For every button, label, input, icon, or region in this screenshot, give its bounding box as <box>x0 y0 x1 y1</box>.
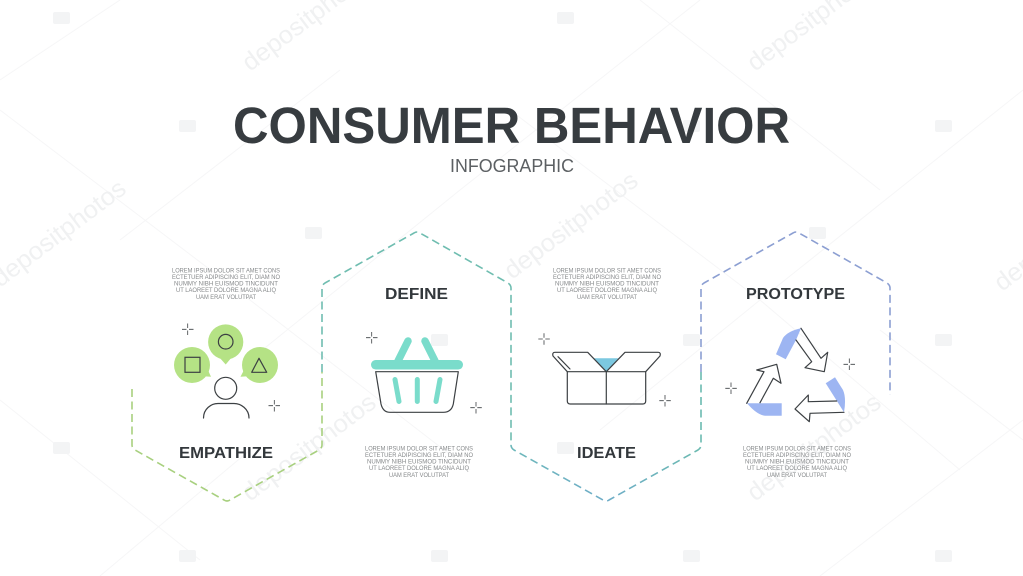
sparkle <box>268 400 280 412</box>
text block: define description: NUMMY NIBH EUISMOD TINCIDUNT <box>367 460 471 466</box>
text block: prototype description: UAM ERAT VOLUTPAT <box>767 473 827 479</box>
text block: prototype description: ECTETUER ADIPISCING ELIT, DIAM NO <box>743 453 851 459</box>
text block: empathize description: NUMMY NIBH EUISMOD TINCIDUNT <box>174 282 278 288</box>
text block: ideate description: ECTETUER ADIPISCING ELIT, DIAM NO <box>553 275 661 281</box>
text block: define description: LOREM IPSUM DOLOR SIT AMET CONS <box>365 446 473 452</box>
heading: empathize: EMPATHIZE <box>179 445 273 462</box>
heading: prototype: PROTOTYPE <box>746 286 845 303</box>
icon: recycling arrows <box>747 328 845 422</box>
sparkle <box>538 333 550 345</box>
heading: ideate: IDEATE <box>577 445 636 462</box>
background watermark: depositphotos <box>237 388 381 507</box>
panel: define <box>322 232 511 479</box>
text block: define description <box>365 446 473 479</box>
left speech bubble with square <box>174 347 211 383</box>
sparkle <box>725 382 737 394</box>
text block: prototype description <box>743 446 851 479</box>
text block: empathize description: UAM ERAT VOLUTPAT <box>196 295 256 301</box>
dashed hexagon outline: empathize <box>132 372 322 501</box>
sparkle <box>844 358 855 370</box>
text block: ideate description: LOREM IPSUM DOLOR SIT AMET CONS <box>553 268 661 274</box>
panel: prototype <box>701 232 890 479</box>
text block: ideate description: UT LAOREET DOLORE MAGNA ALIQ <box>557 288 657 294</box>
text block: empathize description: ECTETUER ADIPISCING ELIT, DIAM NO <box>172 275 280 281</box>
panel: ideate <box>511 268 701 501</box>
icon: shopping basket <box>371 341 463 412</box>
text block: prototype description: LOREM IPSUM DOLOR SIT AMET CONS <box>743 446 851 452</box>
sparkle <box>470 402 482 414</box>
background watermark: depositphotos <box>499 166 643 285</box>
text block: ideate description: UAM ERAT VOLUTPAT <box>577 295 637 301</box>
panel: empathize <box>132 268 322 501</box>
icon: open box <box>553 352 660 404</box>
dashed hexagon outline: define <box>322 232 511 445</box>
text block: ideate description <box>553 268 661 301</box>
dashed hexagon outline: prototype <box>701 232 890 395</box>
text block: ideate description: NUMMY NIBH EUISMOD TINCIDUNT <box>555 282 659 288</box>
sparkle <box>659 395 671 406</box>
text block: prototype description: NUMMY NIBH EUISMOD TINCIDUNT <box>745 460 849 466</box>
text block: define description: UAM ERAT VOLUTPAT <box>389 473 449 479</box>
title: CONSUMER BEHAVIOR <box>233 97 790 154</box>
person <box>204 377 249 418</box>
background watermark: depositphotos <box>742 388 886 507</box>
subtitle: INFOGRAPHIC <box>450 156 574 176</box>
text block: define description: ECTETUER ADIPISCING ELIT, DIAM NO <box>365 453 473 459</box>
text block: empathize description: LOREM IPSUM DOLOR SIT AMET CONS <box>172 268 280 274</box>
dashed hexagon outline: ideate <box>511 372 701 501</box>
text block: define description: UT LAOREET DOLORE MAGNA ALIQ <box>369 466 469 472</box>
sparkle <box>366 332 378 344</box>
top speech bubble with circle <box>208 324 243 364</box>
text block: empathize description <box>172 268 280 301</box>
sparkle <box>182 324 194 335</box>
text block: prototype description: UT LAOREET DOLORE MAGNA ALIQ <box>747 466 847 472</box>
text block: empathize description: UT LAOREET DOLORE MAGNA ALIQ <box>176 288 276 294</box>
heading: define: DEFINE <box>385 286 448 303</box>
right speech bubble with triangle <box>240 347 278 383</box>
icon: person with speech bubbles <box>174 324 278 418</box>
